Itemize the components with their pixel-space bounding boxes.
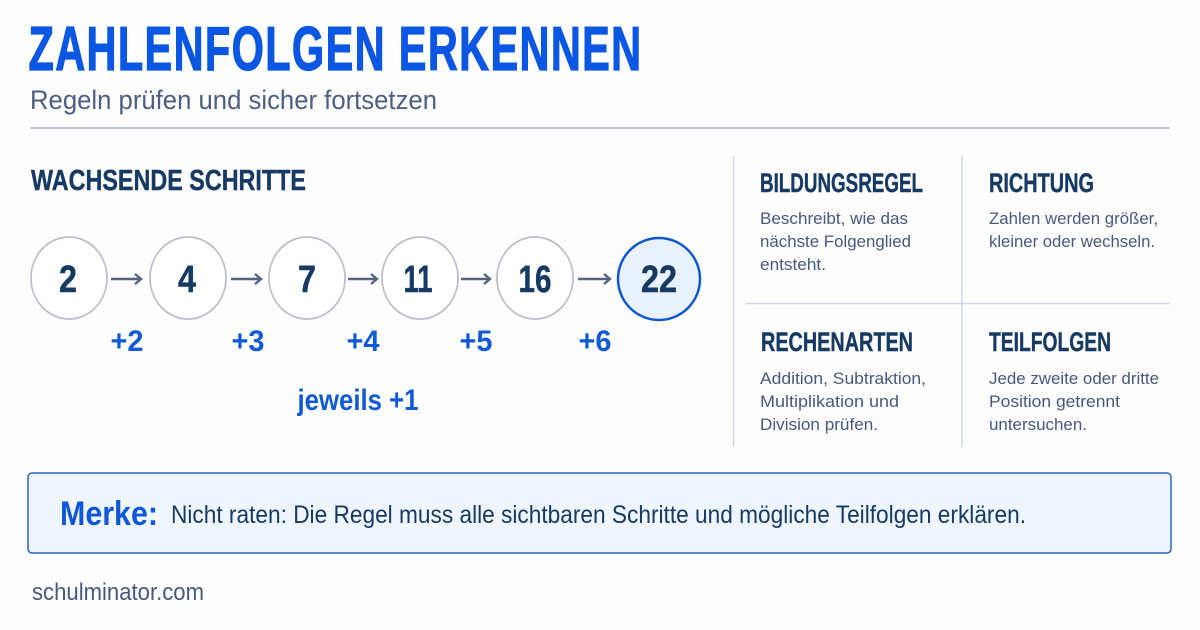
arrow 2 [231,274,261,284]
panel: Bildungsregel: BILDUNGSREGEL [760,168,923,198]
panel: Rechenarten: Addition, Subtraktion, [760,369,926,388]
callout: Merke: Nicht raten: Die Regel muss alle sichtbaren Schritte und mögliche Teilfolgen erklären. [171,501,1026,529]
number 4 [150,237,226,319]
step +5: +5 [460,325,492,358]
callout: Merke: Merke: [60,495,158,533]
panel: Richtung: kleiner oder wechseln. [989,232,1155,251]
panel: Rechenarten: Division prüfen. [760,415,878,434]
number 22 highlighted: 22 [641,259,677,301]
number 7 [269,237,345,319]
number 4: 4 [178,259,196,301]
step +6: +6 [578,325,612,358]
number 16: 16 [518,259,552,301]
footer: schulminator.com [32,579,204,606]
panel: Richtung [989,168,1158,251]
subtitle: Regeln prüfen und sicher fortsetzen [30,85,437,115]
panel: Teilfolgen: TEILFOLGEN [989,327,1111,357]
section heading: WACHSENDE SCHRITTE [31,165,306,197]
panel: Richtung: RICHTUNG [989,168,1094,198]
panel: Teilfolgen: Jede zweite oder dritte [989,369,1159,388]
number 11: 11 [404,259,432,301]
number 11 [382,237,458,319]
arrow 4 [461,274,490,284]
panel: Rechenarten: RECHENARTEN [761,327,913,357]
arrow 3 [348,274,377,284]
panel: Teilfolgen [989,327,1159,434]
panel: Richtung: Zahlen werden größer, [989,209,1158,228]
number 16 [497,237,573,319]
step +2: +2 [110,325,144,358]
number 2 [31,237,107,319]
panel: Bildungsregel: Beschreibt, wie das [760,209,908,228]
arrow 5 [578,274,610,284]
number 22 highlighted [618,238,700,320]
difference note: jeweils +1 [297,384,418,417]
title: ZAHLENFOLGEN ERKENNEN [28,15,642,84]
number 7: 7 [298,259,316,301]
panel: Bildungsregel: entsteht. [760,255,826,274]
step +4: +4 [346,325,380,358]
panel: number sequence [31,165,700,417]
panel: Teilfolgen: untersuchen. [989,415,1087,434]
panel: Rechenarten: Multiplikation und [760,392,899,411]
panel: Rechenarten [760,327,926,434]
number 2: 2 [59,259,77,301]
panel: Bildungsregel [760,168,923,274]
panel: Bildungsregel: nächste Folgenglied [760,232,911,251]
panel: Teilfolgen: Position getrennt [989,392,1120,411]
arrow 1 [111,274,141,284]
step +3: +3 [232,325,264,358]
callout: Merke [28,473,1171,553]
